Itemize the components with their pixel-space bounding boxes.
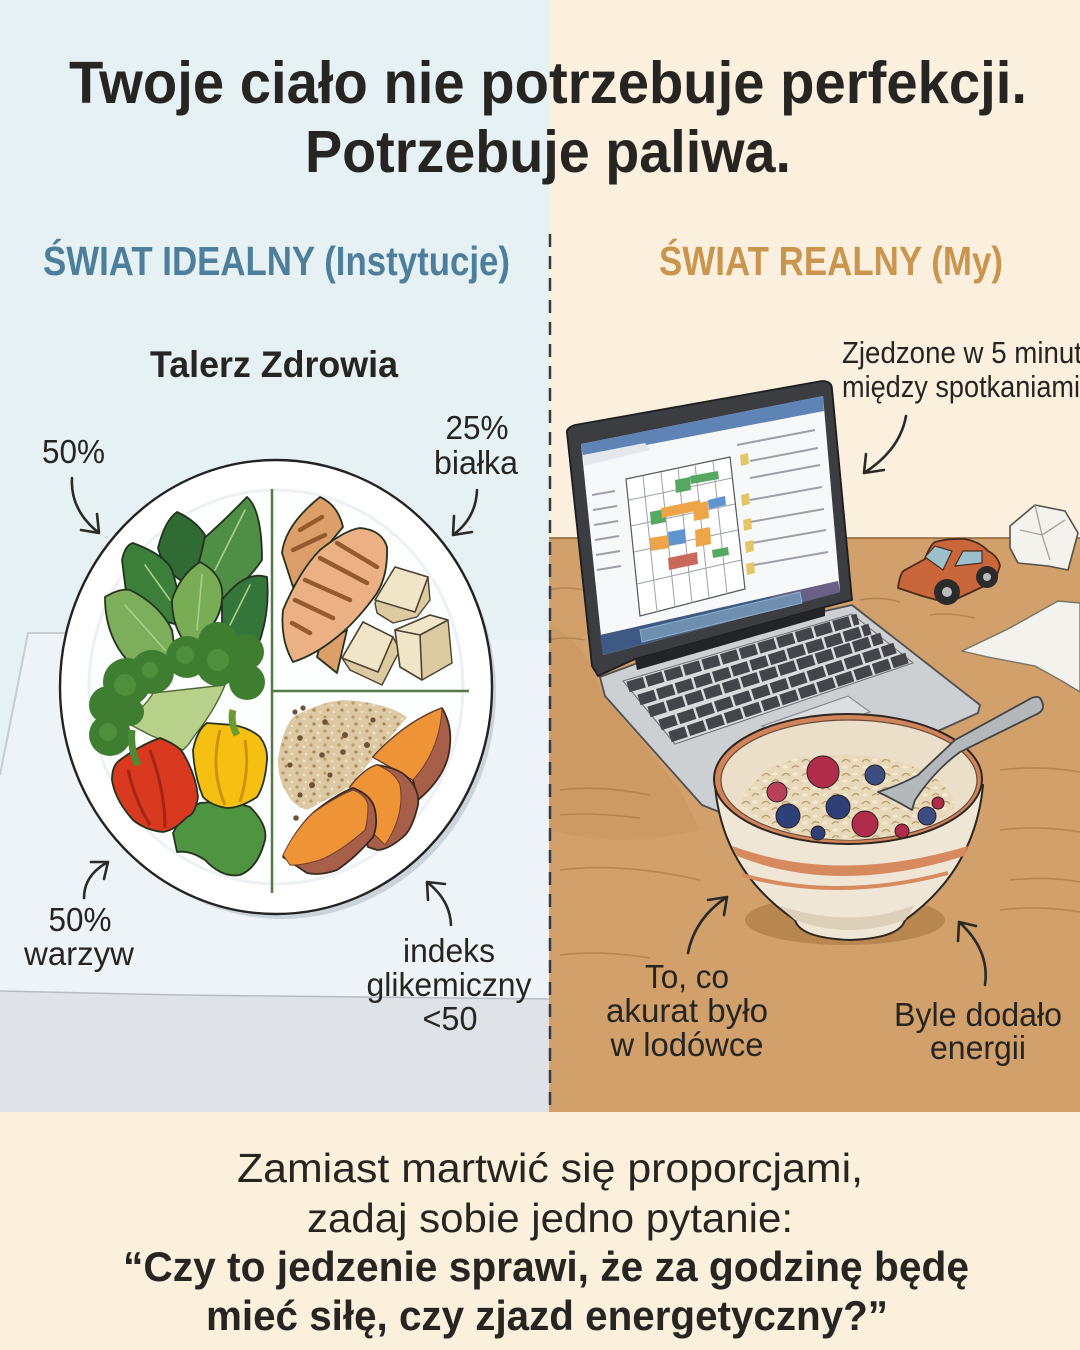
spoon: [878, 697, 1043, 810]
bottom question: “Czy to jedzenie sprawi, że za godzinę będę: [123, 1243, 969, 1290]
laptop base: [600, 605, 980, 813]
title: [69, 50, 1027, 185]
laptop hinge: [635, 607, 825, 670]
sweet potato slices: [283, 708, 450, 874]
vegetables: red pepper: [112, 730, 198, 832]
bottom intro text: zadaj sobie jedno pytanie:: [307, 1195, 793, 1241]
bottom intro text: [237, 1145, 863, 1241]
label: 50% vegetables: 50%: [48, 901, 112, 938]
label: what was in the fridge: w lodówce: [610, 1026, 764, 1063]
arrow: glycemic index: [427, 882, 451, 925]
trackpad: [762, 696, 870, 738]
label: glycemic index: [366, 932, 532, 1037]
title: Twoje ciało nie potrzebuje perfekcji.: [69, 50, 1027, 116]
bottom intro text: Zamiast martwić się proporcjami,: [237, 1145, 863, 1191]
vegetables: leafy greens: [105, 497, 268, 665]
arrow: to laptop: [864, 416, 906, 473]
illustration: laptop: [567, 381, 980, 813]
illustration: crumpled paper: [1010, 505, 1078, 570]
label: 25% protein: [434, 409, 519, 481]
panel: bottom message: [0, 1112, 1080, 1350]
plate dividers: [272, 489, 469, 893]
label: 25% protein: białka: [434, 444, 519, 481]
illustration: toy car: [898, 539, 1000, 605]
vegetables: bottom leaf: [173, 802, 265, 875]
panel: right wooden desk: [549, 538, 1080, 1112]
arrow: 50% to plate: [72, 478, 99, 533]
label: what was in the fridge: [606, 958, 768, 1063]
protein: chicken: [282, 497, 387, 673]
background: right panel: [549, 0, 1080, 1112]
keyboard: [623, 614, 913, 744]
bottom question: mieć siłę, czy zjazd energetyczny?”: [206, 1292, 888, 1339]
vegetables: yellow pepper: [193, 710, 267, 808]
label: eaten in 5 minutes: [842, 335, 1080, 404]
oatmeal toppings: [767, 756, 944, 840]
heading: health plate: Talerz Zdrowia: [150, 344, 398, 385]
label: 50% vegetables: [23, 901, 134, 972]
bottom question: [123, 1243, 969, 1339]
label: what was in the fridge: akurat było: [606, 992, 768, 1029]
title: Potrzebuje paliwa.: [305, 119, 791, 185]
laptop lid: [567, 381, 852, 676]
email list on screen: [592, 430, 828, 575]
label: glycemic index: indeks: [403, 932, 495, 969]
vegetables: broccoli: [89, 622, 265, 756]
label: gives energy: [894, 996, 1062, 1066]
arrow: what was in the fridge: [688, 897, 727, 953]
background: left panel: [0, 0, 549, 1112]
label: what was in the fridge: To, co: [645, 958, 729, 995]
laptop screen: [581, 396, 840, 655]
heading: ideal world: ŚWIAT IDEALNY (Instytucje): [43, 238, 510, 284]
arrow: vegetables: [84, 862, 108, 898]
label: glycemic index: <50: [422, 1000, 478, 1037]
label: gives energy: Byle dodało: [894, 996, 1062, 1033]
illustration: napkin: [962, 601, 1080, 692]
heading: real world: ŚWIAT REALNY (My): [659, 238, 1003, 284]
label: 50%: 50%: [42, 433, 105, 470]
protein: tofu cubes: [342, 567, 452, 685]
arrow: protein to plate: [453, 490, 477, 535]
plate illustration: [60, 460, 496, 919]
panel: left table surface: [0, 633, 549, 1112]
label: 50% vegetables: warzyw: [23, 935, 134, 972]
illustration: oatmeal bowl: [714, 697, 1043, 945]
label: gives energy: energii: [930, 1029, 1026, 1066]
center dashed divider: [549, 234, 551, 1112]
grains: quinoa: [278, 700, 407, 821]
label: 25% protein: 25%: [446, 409, 508, 446]
arrow: gives energy: [958, 922, 986, 985]
calendar on screen: [626, 457, 745, 616]
label: glycemic index: glikemiczny: [366, 966, 532, 1003]
